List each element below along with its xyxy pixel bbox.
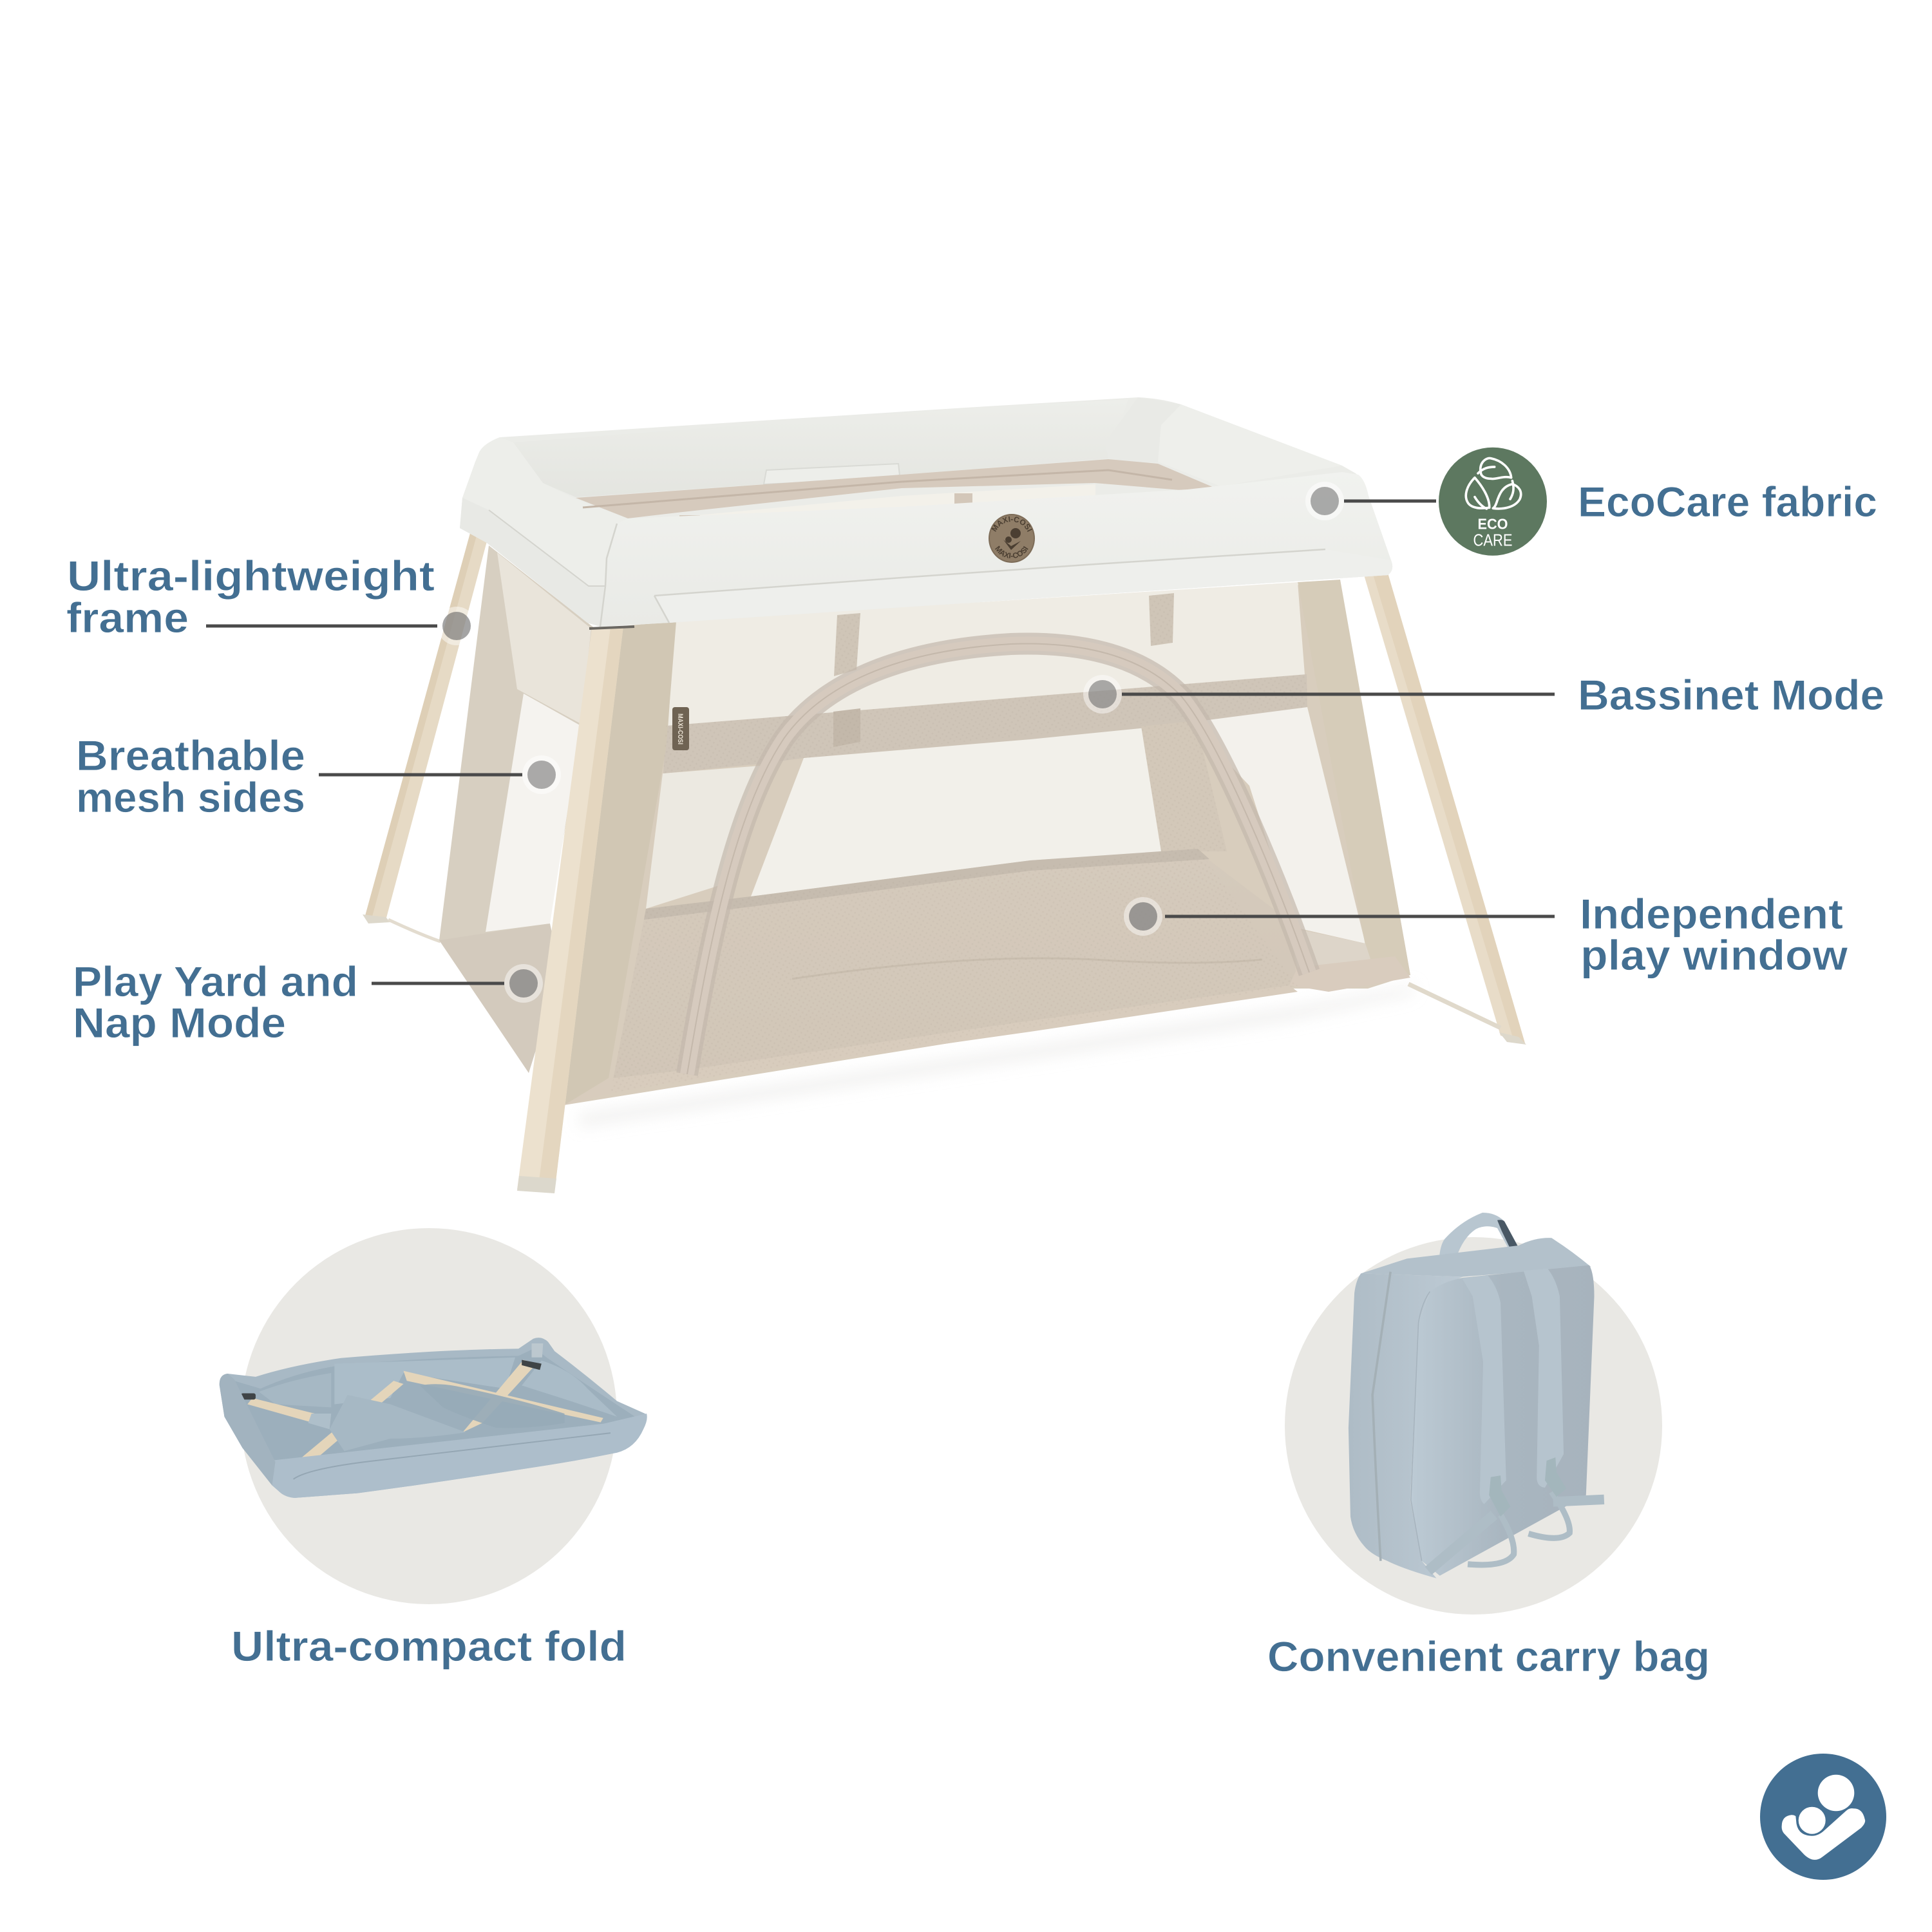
bottom hem bbox=[564, 985, 1298, 1105]
background circle bbox=[1285, 1237, 1662, 1615]
front leg bbox=[517, 626, 623, 1193]
callout dot: mesh sides bbox=[522, 755, 561, 794]
rail right surface bbox=[1158, 404, 1342, 486]
right fabric strip bbox=[1298, 580, 1410, 975]
callout dot: frame bbox=[437, 607, 476, 645]
label: breathable mesh sides: Breathable bbox=[76, 732, 305, 779]
back window straps bbox=[679, 493, 972, 525]
upper mesh window bbox=[666, 582, 1307, 760]
rail left seam bbox=[489, 510, 605, 586]
label: convenient carry bag: Convenient carry bag bbox=[1267, 1633, 1710, 1680]
draped mesh left bbox=[330, 1395, 466, 1451]
eco word: ECO bbox=[1477, 515, 1508, 532]
label: ultra-lightweight frame: frame bbox=[66, 594, 189, 641]
rail seams bbox=[600, 524, 1325, 627]
leader line: bassinet bbox=[1122, 693, 1555, 696]
label: ultra-lightweight frame: Ultra-lightweight bbox=[67, 552, 435, 600]
left fabric strip bbox=[564, 621, 676, 1105]
label: breathable mesh sides: mesh sides bbox=[76, 773, 305, 821]
bassinet band bbox=[663, 674, 1307, 773]
front rim seam bbox=[294, 1433, 611, 1479]
leader line: eco fabric bbox=[1344, 500, 1436, 502]
brand badge bbox=[989, 514, 1035, 563]
label: breathable mesh sides bbox=[76, 732, 305, 821]
icon: eco care badge bbox=[1439, 448, 1547, 556]
back mesh area bbox=[334, 1358, 515, 1405]
right leg bbox=[1364, 573, 1525, 1043]
hinge right bbox=[522, 1360, 542, 1370]
bassinet strap centre bbox=[833, 708, 860, 747]
hinge shadow bbox=[589, 627, 634, 629]
rail left lower hem bbox=[460, 498, 605, 627]
carry bag bbox=[1349, 1213, 1604, 1578]
brand tag bbox=[672, 707, 689, 750]
label: independent play window bbox=[1580, 890, 1848, 979]
product: travel crib bbox=[363, 397, 1526, 1193]
callout dot: bassinet bbox=[1083, 675, 1122, 714]
badge text top: MAXI-COSI bbox=[991, 516, 1032, 532]
bassinet leg bbox=[1141, 721, 1227, 851]
wood bar long horizontal bbox=[404, 1371, 603, 1423]
zipper seam bbox=[1372, 1272, 1390, 1561]
label: independent play window: play window bbox=[1580, 931, 1848, 979]
wood bar short left bbox=[247, 1398, 315, 1423]
leader line: mesh sides bbox=[319, 773, 522, 777]
icon: brand logo bbox=[1760, 1754, 1886, 1880]
hinge left bbox=[241, 1394, 256, 1399]
lower centre mesh window bbox=[751, 726, 1161, 896]
leader line: play yard bbox=[372, 981, 504, 985]
lower straps bbox=[1428, 1492, 1604, 1571]
leader line: frame bbox=[206, 625, 437, 627]
front rim bbox=[272, 1414, 647, 1498]
floor shadow bbox=[580, 985, 1417, 1127]
rail back inner wall bbox=[513, 399, 1128, 497]
zip teeth bbox=[583, 470, 1172, 507]
floor wrinkle bbox=[792, 958, 1262, 979]
left shoulder strap bbox=[1462, 1275, 1506, 1504]
back window strip bbox=[657, 484, 1095, 529]
care word: CARE bbox=[1473, 531, 1512, 550]
callout dot: play yard bbox=[504, 964, 543, 1003]
front panel base bbox=[564, 582, 1410, 1105]
floor of crib bbox=[611, 850, 1298, 1093]
lower right mesh window bbox=[1188, 707, 1365, 943]
hinge upper bbox=[532, 1343, 543, 1358]
label: play yard and nap mode: Nap Mode bbox=[73, 999, 286, 1046]
callout dot: eco fabric bbox=[1305, 482, 1344, 520]
left rim bbox=[220, 1374, 276, 1486]
label: ultra-compact fold: Ultra-compact fold bbox=[231, 1622, 627, 1670]
right foot and strap bbox=[1408, 984, 1526, 1045]
lower left mesh window bbox=[646, 766, 761, 909]
handle dark underside bbox=[1497, 1220, 1519, 1249]
icon: three leaves bbox=[1466, 458, 1521, 509]
left buckle bbox=[1489, 1475, 1510, 1517]
rail front hem bbox=[654, 549, 1392, 623]
label: ultra-lightweight frame bbox=[66, 552, 435, 641]
top face bbox=[1361, 1238, 1591, 1276]
left side panel bbox=[439, 545, 595, 1073]
label: bassinet mode: Bassinet Mode bbox=[1578, 671, 1884, 719]
draped mesh centre bbox=[420, 1384, 565, 1428]
floor mesh edge band bbox=[644, 849, 1209, 920]
rail back right fold bbox=[1105, 397, 1181, 462]
label: play yard and nap mode: Play Yard and bbox=[73, 958, 358, 1005]
right shoulder strap bbox=[1524, 1269, 1564, 1488]
rail left surface bbox=[462, 437, 628, 586]
back left leg bbox=[365, 533, 488, 918]
label: play yard and nap mode bbox=[73, 958, 358, 1046]
badge text bottom: MAXI-COSI bbox=[995, 546, 1028, 558]
badge icon bbox=[1003, 528, 1021, 550]
mesh texture bbox=[611, 593, 1307, 1093]
back panel bbox=[1411, 1265, 1595, 1576]
rail front roll bbox=[600, 472, 1392, 627]
label: independent play window: Independent bbox=[1580, 890, 1843, 938]
back left foot and strap bbox=[363, 914, 440, 942]
inner basin bbox=[234, 1348, 635, 1462]
side face bbox=[1349, 1273, 1463, 1578]
corner tab bbox=[1289, 956, 1410, 992]
arched zipper window bbox=[687, 644, 1309, 1074]
panel seam bbox=[1411, 1291, 1430, 1561]
draped mesh right bbox=[522, 1361, 617, 1417]
zip band bbox=[576, 459, 1214, 518]
folded crib bbox=[220, 1338, 647, 1498]
label: ecocare fabric: EcoCare fabric bbox=[1578, 478, 1877, 526]
rail handle loop bbox=[764, 464, 900, 484]
wood bar right diagonal bbox=[462, 1360, 536, 1432]
outer shell bbox=[220, 1338, 647, 1498]
bassinet strap left bbox=[834, 613, 860, 676]
fabric tag text: MAXI-COSI bbox=[676, 714, 684, 744]
bassinet strap right bbox=[1149, 593, 1174, 646]
mesh flap bbox=[308, 1414, 331, 1429]
callout dot: play window bbox=[1124, 897, 1162, 936]
wood bar long diagonal bbox=[300, 1381, 404, 1459]
left mesh area bbox=[259, 1373, 331, 1407]
right floor corner bbox=[1289, 927, 1372, 969]
panel: ultra-compact fold bbox=[220, 1228, 647, 1604]
handle bbox=[1439, 1213, 1519, 1264]
leader line: play window bbox=[1165, 914, 1555, 918]
panel: convenient carry bag bbox=[1285, 1213, 1662, 1615]
top rail outer body bbox=[460, 397, 1392, 627]
right buckle bbox=[1545, 1457, 1566, 1497]
background circle bbox=[241, 1228, 617, 1604]
